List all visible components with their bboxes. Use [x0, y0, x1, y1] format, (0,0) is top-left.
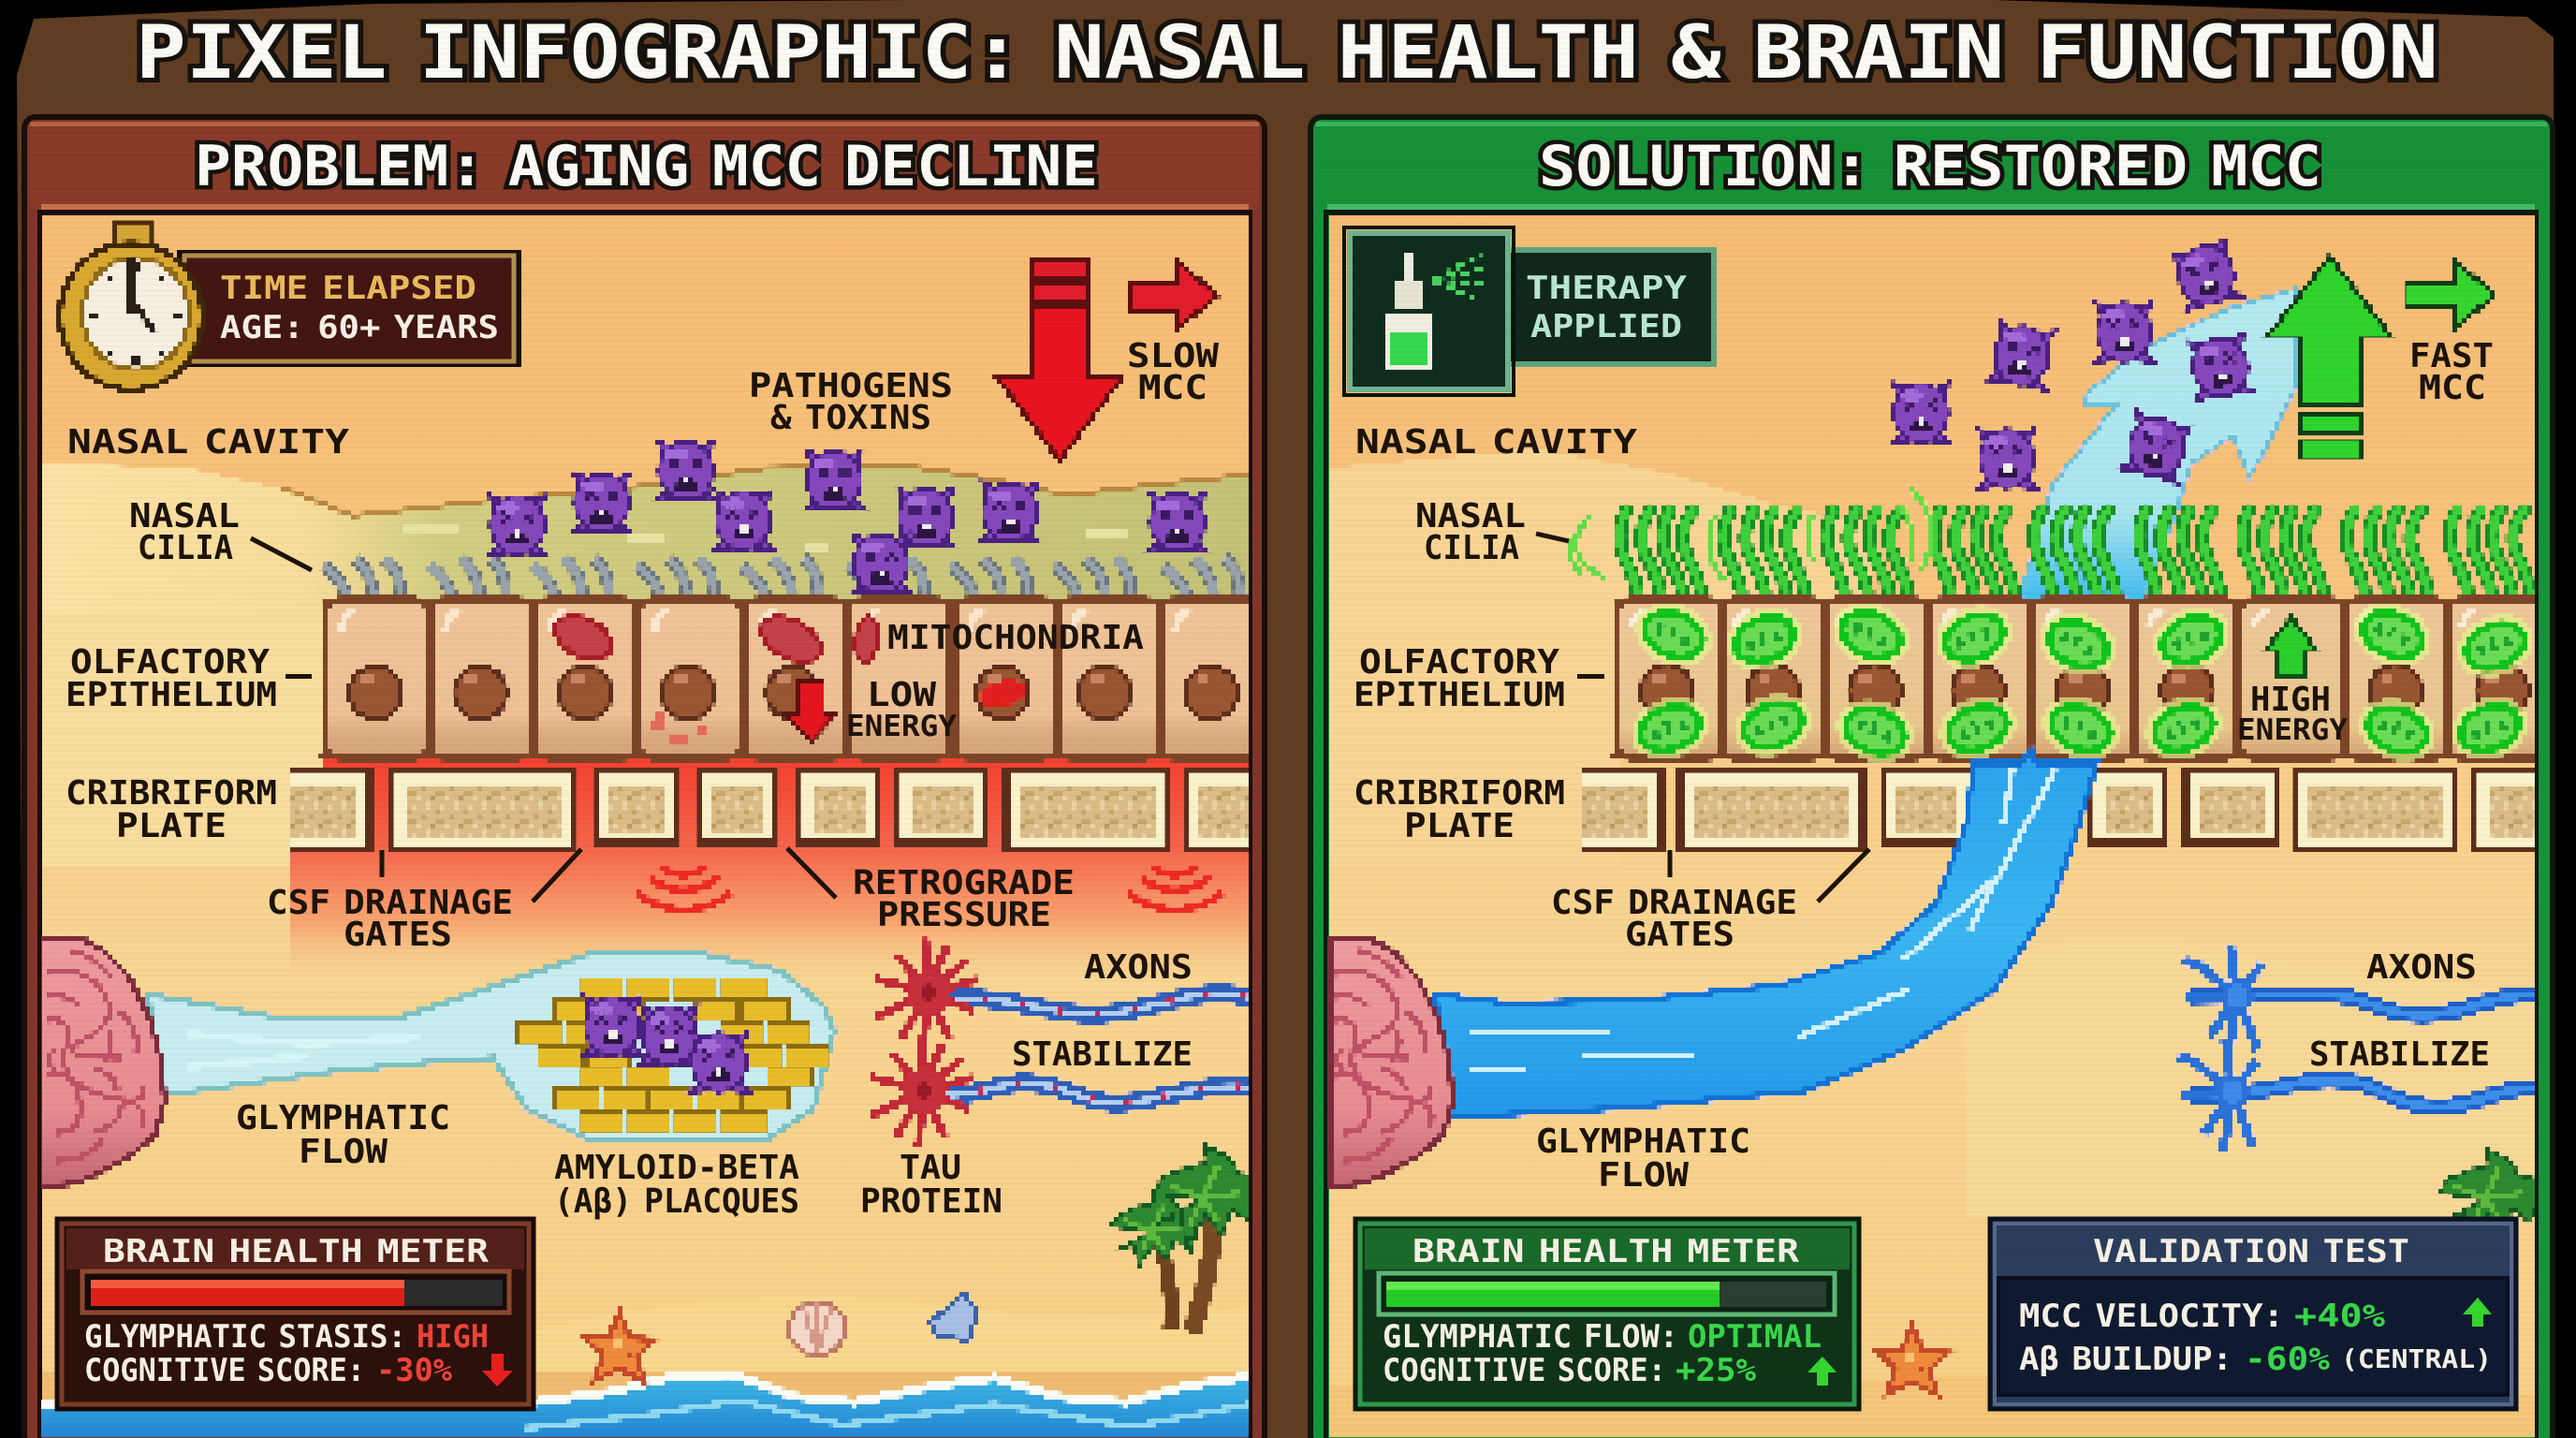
- green active cilia: [1619, 510, 2532, 599]
- grey damaged cilia: [323, 559, 1239, 599]
- label: cribriform plate: [1354, 774, 1565, 845]
- crystal: [930, 1294, 977, 1341]
- label: stabilize: STABILIZE: [2309, 1035, 2490, 1074]
- label: slow mcc: [1127, 337, 1219, 407]
- retrograde pressure zone: [291, 756, 1249, 978]
- label: stabilize: STABILIZE: [1012, 1035, 1193, 1074]
- label: fast mcc: FAST: [2409, 337, 2494, 375]
- heading: problem: PROBLEM: AGING MCC DECLINE: [195, 134, 1098, 199]
- label: slow mcc: MCC: [1138, 369, 1208, 407]
- scene: problem illustration: [28, 213, 1271, 1438]
- healthy mitochondria lower: [1623, 684, 2537, 772]
- label: cribriform plate: CRIBRIFORM: [66, 774, 277, 813]
- label: retrograde pressure: RETROGRADE: [853, 864, 1075, 902]
- label: csf drainage gates: [267, 849, 581, 954]
- small green arrow: [2406, 262, 2496, 327]
- label: retrograde pressure: PRESSURE: [877, 896, 1051, 934]
- label: csf drainage gates: CSF DRAINAGE: [267, 884, 513, 922]
- meter line: flow: [1383, 1318, 1822, 1356]
- label: tau protein: TAU: [900, 1149, 961, 1187]
- time elapsed box: [177, 250, 521, 367]
- label: olfactory epithelium: [1354, 643, 1604, 714]
- palm tree: [2438, 1150, 2543, 1245]
- beach sand: [1327, 1370, 2535, 1438]
- label: nasal cilia: CILIA: [1424, 529, 1519, 567]
- cribriform plate: [1580, 771, 2559, 850]
- label: olfactory epithelium: OLFACTORY: [1359, 643, 1559, 682]
- palm trees: [1111, 1146, 1266, 1333]
- ocean: [28, 1374, 1264, 1438]
- mitochondria debris: [651, 712, 707, 744]
- label: cribriform plate: CRIBRIFORM: [1354, 774, 1565, 813]
- panel: solution: [1310, 117, 2559, 1438]
- validation heading: VALIDATION TEST: [2093, 1233, 2409, 1270]
- brain: [1329, 939, 1453, 1187]
- label: tau protein: PROTEIN: [860, 1182, 1003, 1221]
- label: mitochondria: MITOCHONDRIA: [887, 619, 1144, 657]
- dune patch: [1966, 939, 2535, 1217]
- stopwatch: [60, 225, 202, 389]
- heading: solution: SOLUTION: RESTORED MCC: [1539, 134, 2321, 199]
- label: pathogens: PATHOGENS: [749, 367, 953, 405]
- mucus layer: [41, 463, 1249, 618]
- label: glymphatic flow: [236, 1099, 450, 1171]
- label: glymphatic flow: [1536, 1123, 1750, 1195]
- label: tau protein: [860, 1149, 1003, 1221]
- label: fast mcc: [2409, 337, 2494, 407]
- icon: green up arrow: [1808, 1357, 1837, 1386]
- label: pathogens: [749, 367, 953, 437]
- icon: nasal spray bottle: [1386, 251, 1488, 369]
- meter line: score: -30%: [376, 1352, 453, 1389]
- label: csf drainage gates: [1551, 849, 1869, 954]
- scene: solution illustration: [1327, 213, 2559, 1438]
- glymphatic water stream: [1436, 749, 2097, 1118]
- validation line: buildup: (CENTRAL): [2341, 1343, 2492, 1374]
- validation line: velocity: +40%: [2294, 1298, 2386, 1335]
- axons with tau damage: [942, 993, 1254, 1103]
- label: pathogens: & TOXINS: [770, 399, 931, 437]
- label: nasal cilia: CILIA: [138, 529, 233, 567]
- label: csf drainage gates: GATES: [344, 916, 452, 954]
- pressure arcs: [637, 867, 1222, 910]
- beach sand: [537, 1361, 1245, 1372]
- meter heading: BRAIN HEALTH METER: [1412, 1233, 1800, 1270]
- nuclei: [1641, 665, 2528, 717]
- label: olfactory epithelium: EPITHELIUM: [1354, 676, 1565, 714]
- panel frame: problem: [24, 117, 1265, 1438]
- validation line: buildup: -60%: [2245, 1341, 2331, 1378]
- cilia motion arcs: [1571, 487, 1932, 580]
- therapy applied box: [1344, 227, 1714, 395]
- meter heading: BRAIN HEALTH METER: [103, 1233, 490, 1270]
- label: amyloid-beta plaques: AMYLOID-BETA: [554, 1149, 799, 1187]
- label: glymphatic flow: FLOW: [299, 1133, 388, 1171]
- big red slow arrow: [998, 259, 1121, 461]
- lighter nasal cavity band: [1327, 449, 1872, 866]
- epithelial cells: [1609, 597, 2550, 760]
- label: nasal cilia: [1415, 497, 1569, 567]
- panel frame: solution: [1310, 117, 2553, 1438]
- nuclei: [349, 667, 1237, 719]
- meter line: score: COGNITIVE SCORE:: [84, 1352, 365, 1389]
- icon: red down arrow: [482, 1354, 513, 1387]
- meter line: flow: GLYMPHATIC FLOW:: [1383, 1318, 1678, 1356]
- cribriform plate: [291, 771, 1271, 850]
- label: therapy: THERAPY: [1526, 270, 1688, 307]
- validation line: buildup: [2019, 1341, 2492, 1378]
- label: slow mcc: SLOW: [1127, 337, 1219, 375]
- label: cribriform plate: PLATE: [1404, 807, 1515, 845]
- big green fast arrow: [2267, 257, 2392, 459]
- label: nasal cilia: [129, 497, 312, 570]
- meter line: score: COGNITIVE SCORE:: [1383, 1352, 1666, 1389]
- plaque pathogens: [582, 996, 749, 1093]
- panel: problem: [24, 117, 1271, 1438]
- label: olfactory epithelium: OLFACTORY: [70, 643, 270, 682]
- label: amyloid-beta plaques: [554, 1149, 799, 1221]
- red damaged mitochondria: [549, 608, 1025, 709]
- mucus edge: [281, 465, 1249, 516]
- small red arrow: [1130, 262, 1218, 328]
- label: cribriform plate: [66, 774, 277, 845]
- label: low energy: [846, 676, 957, 743]
- mucus highlights: [402, 524, 1128, 552]
- sand background: [41, 213, 1249, 1438]
- label: glymphatic flow: GLYMPHATIC: [1536, 1123, 1750, 1161]
- label: high energy: HIGH: [2250, 681, 2331, 719]
- meter line: stasis: GLYMPHATIC STASIS:: [84, 1318, 406, 1356]
- starfish: [1877, 1326, 1948, 1395]
- title: PIXEL INFOGRAPHIC: NASAL HEALTH & BRAIN FUNCTION: [136, 11, 2438, 95]
- epithelial cells: [317, 597, 1262, 760]
- ocean wave lines: [524, 1401, 1249, 1429]
- tau protein stars: [871, 938, 979, 1149]
- label: low energy: ENERGY: [846, 710, 957, 743]
- label: high energy: [2237, 681, 2348, 747]
- label: age: AGE: 60+ YEARS: [220, 309, 499, 346]
- validation test panel: [1990, 1219, 2516, 1409]
- label: csf drainage gates: CSF DRAINAGE: [1551, 884, 1797, 922]
- axons: [2190, 994, 2546, 1107]
- amyloid-beta plaque bricks: [518, 978, 829, 1132]
- label: glymphatic flow: FLOW: [1598, 1156, 1689, 1195]
- label: cribriform plate: PLATE: [116, 807, 227, 845]
- label: glymphatic flow: GLYMPHATIC: [236, 1099, 450, 1137]
- label: fast mcc: MCC: [2419, 369, 2486, 407]
- label: applied: APPLIED: [1530, 308, 1682, 345]
- brain: [41, 939, 165, 1187]
- label: axons: AXONS: [1084, 948, 1193, 987]
- pathogens expelled: [1891, 239, 2254, 489]
- label: csf drainage gates: GATES: [1625, 916, 1734, 954]
- brain health meter: solution: [1355, 1219, 1859, 1409]
- pathogens: [488, 441, 1208, 594]
- label: retrograde pressure: [787, 848, 1075, 934]
- high energy arrow: [2265, 617, 2317, 676]
- validation line: buildup: Aβ BUILDUP:: [2019, 1341, 2232, 1378]
- label: olfactory epithelium: EPITHELIUM: [66, 676, 277, 714]
- meter line: score: +25%: [1676, 1352, 1757, 1389]
- label: nasal cavity: NASAL CAVITY: [67, 423, 349, 462]
- meter line: stasis: HIGH: [417, 1318, 489, 1356]
- starfish: [584, 1313, 655, 1382]
- label: low energy: LOW: [867, 676, 936, 714]
- seashell: [789, 1302, 845, 1355]
- stagnant glymphatic flow: [148, 953, 834, 1141]
- low energy arrow: [784, 682, 838, 741]
- label: high energy: ENERGY: [2237, 713, 2348, 747]
- label: axons: AXONS: [2366, 948, 2477, 987]
- icon: green up arrow: [2463, 1298, 2492, 1327]
- validation line: velocity: [2019, 1298, 2386, 1335]
- meter line: flow: OPTIMAL: [1688, 1318, 1822, 1356]
- neurons: [2178, 944, 2261, 1152]
- brain health meter: problem: [57, 1219, 534, 1409]
- label: amyloid-beta plaques: (Aβ) PLACQUES: [554, 1182, 799, 1221]
- pale sand beside cells: [41, 613, 331, 866]
- label: nasal cilia: NASAL: [1415, 497, 1526, 536]
- label: nasal cilia: NASAL: [129, 497, 240, 536]
- healthy mitochondria upper: [1626, 593, 2543, 688]
- expelled mucus spray: [2019, 289, 2294, 601]
- sand background: [1327, 213, 2535, 1438]
- label: olfactory epithelium: [66, 643, 312, 714]
- label: time elapsed: TIME ELAPSED: [220, 270, 476, 307]
- label: nasal cavity: NASAL CAVITY: [1355, 423, 1637, 462]
- validation line: velocity: MCC VELOCITY:: [2019, 1298, 2284, 1335]
